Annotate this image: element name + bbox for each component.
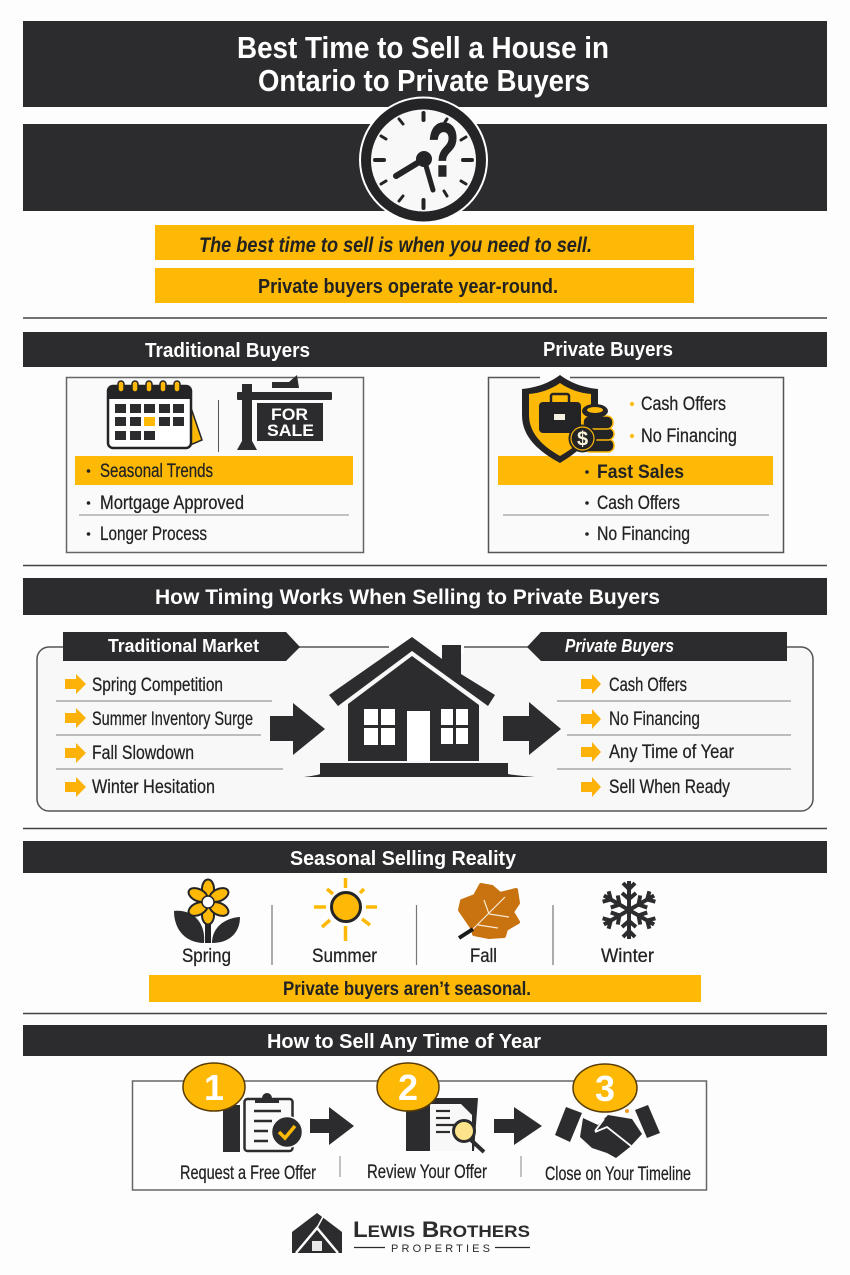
arrow: out of house [503, 702, 561, 755]
season labels: Winter [601, 946, 655, 967]
callout: best time: The best time to sell is when you need to sell. [199, 234, 592, 257]
title banner: Best Time to Sell a House in [237, 30, 609, 65]
panel: private buyers [488, 372, 784, 552]
arrow: step 2 to 3 [494, 1107, 542, 1145]
season labels: Spring [182, 946, 231, 967]
panel: private buyers: Fast Sales [597, 462, 684, 483]
heading: seasonal selling reality [23, 841, 827, 873]
logo: Lewis Brothers Properties: PROPERTIES [391, 1243, 490, 1255]
icon: house [304, 637, 535, 777]
panel: private buyers: Cash Offers [597, 493, 680, 514]
heading: seasonal selling reality: Seasonal Selling Reality [290, 848, 517, 870]
panel: traditional buyers: Seasonal Trends [100, 461, 213, 482]
icon: clock with question mark [359, 96, 488, 224]
panel: three steps: Close on Your Timeline [545, 1164, 691, 1185]
icon: for sale sign [237, 375, 332, 450]
icon: for sale sign: FOR [271, 405, 308, 424]
icon: winter snowflake [600, 881, 658, 939]
title banner: Ontario to Private Buyers [258, 63, 590, 98]
panel: private buyers: Cash Offers [641, 394, 726, 415]
panel: private buyers: No Financing [597, 524, 690, 545]
step 3 badge [573, 1064, 637, 1112]
icon: clock with question mark: ? [428, 108, 459, 193]
step 2 badge: 2 [398, 1067, 418, 1108]
arrow: into house [270, 703, 325, 755]
panel: traditional buyers: Longer Process [100, 524, 207, 545]
tab: private buyers: Private Buyers [565, 636, 674, 656]
icon: shield with briefcase and coins: $ [577, 428, 588, 450]
list: traditional market: Spring Competition [92, 675, 223, 696]
icon: clipboard with check [223, 1093, 302, 1152]
list: private buyers: No Financing [609, 709, 700, 730]
callout: not seasonal: Private buyers aren’t seasonal. [283, 979, 531, 1000]
heading: how to sell: How to Sell Any Time of Year [267, 1031, 541, 1053]
list: private buyers: Any Time of Year [609, 742, 735, 763]
icon: summer sun [314, 878, 377, 941]
panel: traditional buyers [66, 375, 364, 552]
step 1 badge [183, 1063, 245, 1111]
panel: three steps [132, 1063, 706, 1190]
list: traditional market: Winter Hesitation [92, 777, 215, 798]
panel: traditional buyers: Mortgage Approved [100, 493, 244, 514]
list: private buyers: Sell When Ready [609, 777, 730, 798]
season labels: Fall [470, 946, 497, 967]
list: traditional market: Fall Slowdown [92, 743, 194, 764]
panel: private buyers: No Financing [641, 426, 737, 447]
icon: fall leaf [459, 885, 518, 938]
title banner [23, 21, 827, 107]
season labels: Summer [312, 946, 378, 967]
heading: buyer comparison: Private Buyers [543, 339, 673, 361]
callout: year-round: Private buyers operate year-round. [258, 276, 558, 298]
tab: private buyers [527, 632, 787, 661]
step 1 badge: 1 [204, 1067, 224, 1108]
heading: how to sell [23, 1025, 827, 1056]
callout: year-round [155, 268, 694, 303]
logo: Lewis Brothers Properties [292, 1213, 530, 1255]
callout: best time [155, 225, 694, 260]
icon: for sale sign: SALE [267, 421, 314, 440]
clock banner [23, 124, 827, 211]
icon: calendar [107, 381, 202, 448]
panel: three steps: Request a Free Offer [180, 1163, 317, 1184]
heading: buyer comparison [23, 332, 827, 367]
icon: shield with briefcase and coins [522, 372, 614, 463]
list: private buyers: Cash Offers [609, 675, 687, 696]
icon: spring flower [174, 880, 240, 943]
season labels [182, 946, 655, 967]
step 2 badge [377, 1063, 439, 1111]
heading: how timing works [23, 578, 827, 615]
panel: timing comparison [37, 632, 813, 811]
list: private buyers [557, 674, 791, 798]
icon: handshake [555, 1105, 660, 1158]
tab: traditional market: Traditional Market [108, 636, 259, 656]
heading: how timing works: How Timing Works When Selling to Private Buyers [155, 586, 660, 609]
icon: document with magnifier [406, 1098, 484, 1152]
tab: traditional market [63, 632, 300, 661]
logo: Lewis Brothers Properties: LEWIS BROTHERS [353, 1217, 530, 1242]
step 3 badge: 3 [595, 1068, 615, 1109]
callout: not seasonal [149, 975, 701, 1002]
panel: three steps: Review Your Offer [367, 1162, 488, 1183]
list: traditional market [56, 674, 283, 798]
arrow: step 1 to 2 [310, 1107, 354, 1145]
list: traditional market: Summer Inventory Surge [92, 709, 253, 730]
heading: buyer comparison: Traditional Buyers [145, 340, 310, 362]
